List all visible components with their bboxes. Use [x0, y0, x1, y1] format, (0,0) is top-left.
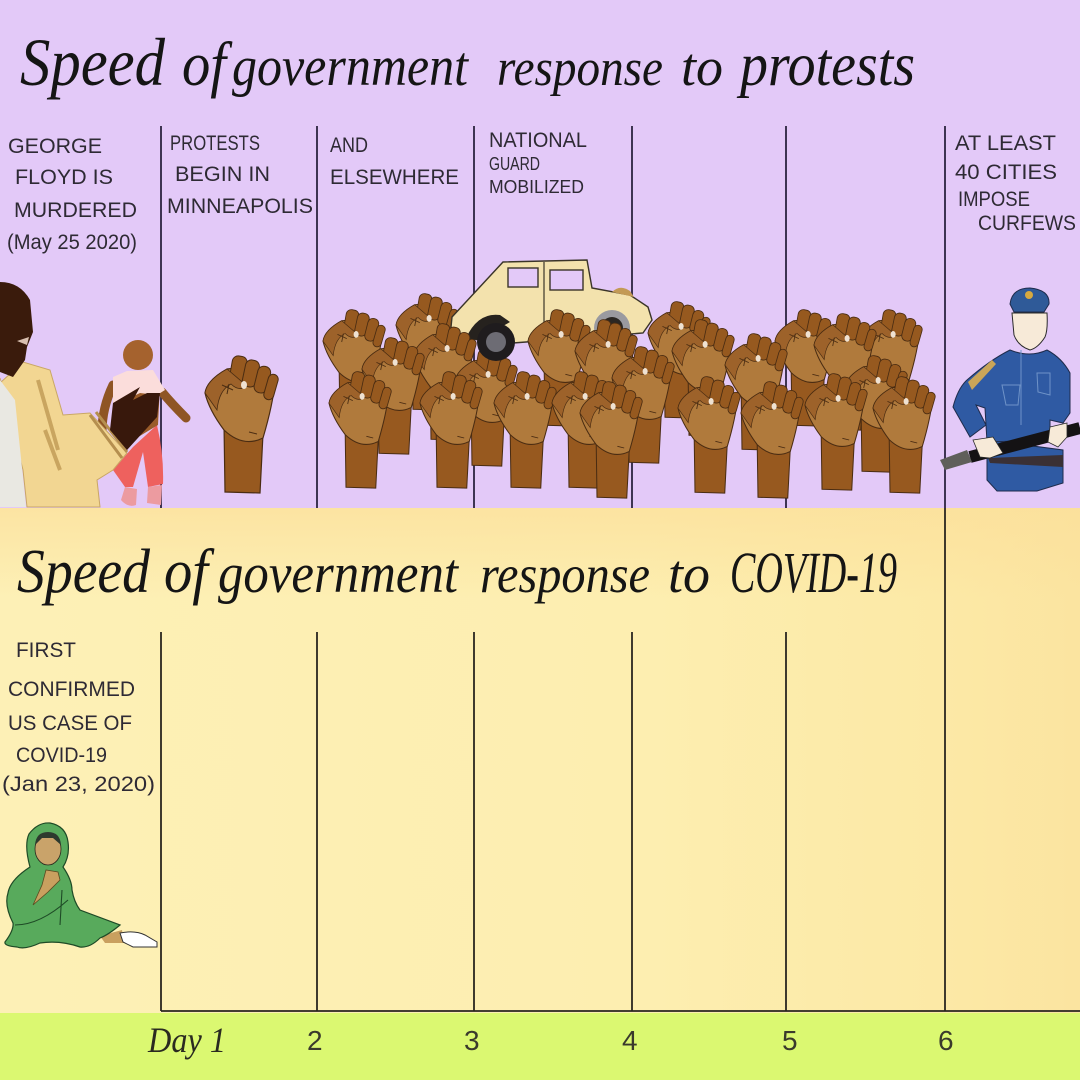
- axis labels: days: 3: [464, 1025, 480, 1056]
- axis labels: days: 6: [938, 1025, 954, 1056]
- title: protests: [20, 24, 915, 100]
- label: and elsewhere: [330, 134, 459, 189]
- label: George Floyd is murdered: [7, 135, 137, 254]
- label: National Guard mobilized: [489, 129, 587, 197]
- label: National Guard mobilized: GUARD: [489, 154, 540, 174]
- label: at least 40 cities impose curfews: IMPOSE: [958, 188, 1030, 211]
- label: protests begin in Minneapolis: PROTESTS: [170, 132, 260, 155]
- label: at least 40 cities impose curfews: [955, 132, 1076, 235]
- title: COVID-19: COVID-19: [730, 540, 897, 605]
- label: National Guard mobilized: MOBILIZED: [489, 177, 584, 197]
- label: National Guard mobilized: NATIONAL: [489, 129, 587, 152]
- label: George Floyd is murdered: GEORGE: [8, 135, 102, 158]
- axis labels: days: 4: [622, 1025, 638, 1056]
- illustration: sick person in green blanket: [5, 823, 157, 948]
- label: George Floyd is murdered: (May 25 2020): [7, 231, 137, 254]
- illustration: crowd of fists with National Guard vehicle: [323, 260, 936, 498]
- title: COVID-19: response: [480, 546, 650, 604]
- axis labels: days: 2: [307, 1025, 323, 1056]
- label: George Floyd is murdered: FLOYD IS: [15, 166, 113, 189]
- title: COVID-19: of: [164, 538, 215, 606]
- axis labels: days: 5: [782, 1025, 798, 1056]
- axis labels: days: [147, 1020, 954, 1060]
- title: COVID-19: Speed: [17, 538, 151, 606]
- panel: COVID-19 background: [0, 508, 1080, 1013]
- title: protests: government: [232, 36, 469, 98]
- title: protests: to: [681, 37, 723, 97]
- label: protests begin in Minneapolis: BEGIN IN: [175, 163, 270, 186]
- icon: single raised fist: [205, 355, 279, 493]
- panel: day axis strip: [0, 1013, 1080, 1080]
- title: COVID-19: [17, 538, 897, 606]
- label: and elsewhere: ELSEWHERE: [330, 166, 459, 189]
- label: George Floyd is murdered: MURDERED: [14, 199, 137, 222]
- label: first confirmed US case: CONFIRMED: [8, 678, 135, 701]
- label: protests begin in Minneapolis: [167, 132, 313, 218]
- axis labels: days: Day 1: [147, 1020, 226, 1060]
- title: COVID-19: government: [218, 543, 459, 605]
- illustration: George Floyd holding baby: [0, 282, 186, 507]
- label: first confirmed US case: FIRST: [16, 639, 76, 662]
- label: first confirmed US case: (Jan 23, 2020): [2, 773, 155, 796]
- illustration: police officer with baton: [940, 288, 1080, 491]
- label: at least 40 cities impose curfews: 40 CITIES: [955, 161, 1057, 184]
- title: protests: of: [182, 31, 233, 99]
- title: protests: Speed: [20, 24, 166, 100]
- panel: protests background: [0, 0, 1080, 508]
- label: first confirmed US case: COVID-19: [16, 744, 107, 767]
- title: protests: protests: [736, 32, 915, 99]
- icon: National Guard vehicle: [450, 260, 652, 346]
- timeline day lines: [161, 126, 1080, 1011]
- label: protests begin in Minneapolis: MINNEAPOLIS: [167, 195, 313, 218]
- label: first confirmed US case: [2, 639, 155, 796]
- label: and elsewhere: AND: [330, 134, 368, 157]
- label: first confirmed US case: US CASE OF: [8, 712, 132, 735]
- title: COVID-19: to: [668, 544, 710, 604]
- label: at least 40 cities impose curfews: AT LEAST: [955, 132, 1056, 155]
- title: protests: response: [497, 40, 663, 97]
